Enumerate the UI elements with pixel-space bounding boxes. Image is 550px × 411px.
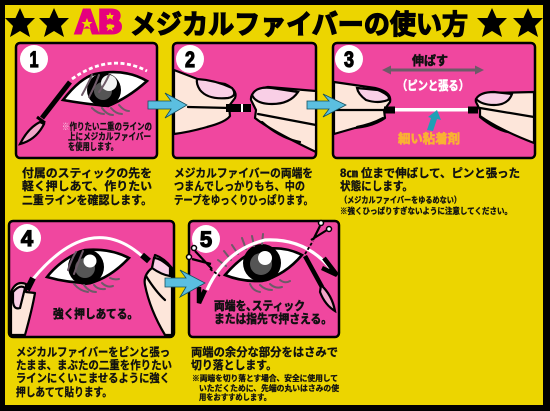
step 3 text: ※強くひっぱりすぎないように注意してください。 — [340, 206, 512, 216]
icon: right cut tape — [322, 258, 337, 275]
icon: left hand — [11, 278, 35, 335]
step number 1: 1 — [30, 47, 38, 72]
caption — [214, 298, 332, 326]
panel: step 1 — [16, 43, 157, 158]
heading text: メジカルファイバーの使い方 — [130, 10, 468, 40]
step number 3: 3 — [344, 47, 354, 72]
title — [5, 3, 543, 40]
step 4 text: ラインにくいこませるように強く — [16, 371, 170, 385]
icon: left fingers — [174, 70, 236, 134]
step number 4 — [13, 224, 41, 252]
panel: step 2 — [173, 43, 316, 158]
icon: eye — [47, 249, 129, 292]
caption: または指先で押さえる。 — [214, 311, 332, 326]
step 1 text — [22, 166, 152, 207]
icon: eye — [63, 72, 147, 115]
step 5 text: 切り落とします。 — [191, 358, 277, 372]
step 5 text: いただくために、先端の丸いはさみの使 — [199, 383, 339, 393]
panel: step 5 — [186, 220, 339, 337]
arrow: step 4 to 5 — [165, 270, 205, 297]
icon: tape — [226, 104, 251, 112]
step number 1 — [20, 45, 48, 73]
icon: scissors right — [311, 220, 332, 240]
step 5 text — [191, 345, 339, 402]
note text: ※作りたい二重のラインの — [62, 121, 152, 133]
step 2 text: テープをゆっくりひっぱります。 — [174, 194, 313, 207]
arrow: double gray — [382, 66, 484, 74]
step number 5: 5 — [200, 227, 212, 252]
arrow: teal pointer — [427, 110, 441, 131]
step 3 text: （メジカルファイバーをゆるめない） — [340, 195, 461, 205]
dotted crease line — [72, 63, 147, 79]
step 2 text — [174, 166, 313, 207]
label: thin adhesive: 細い粘着剤 — [398, 131, 460, 146]
step 4 text: たまま、まぶたの二重を作りたい — [16, 358, 172, 372]
icon: AB logo: AB — [75, 3, 122, 40]
step 4 text: 押しあてて貼ります。 — [16, 385, 112, 399]
label: stretch: 伸ばす — [412, 53, 448, 68]
adhesive line with tabs — [384, 106, 478, 114]
icon: eye — [218, 234, 302, 292]
white stretched line — [33, 238, 142, 279]
step number 2 — [176, 45, 204, 73]
caption: 強く押しあてる。 — [53, 306, 138, 321]
arrow: step 1 to 2 — [148, 93, 187, 118]
step 4 text — [16, 346, 172, 399]
step 2 text: メジカルファイバーの両端を — [174, 166, 313, 180]
step 3 text: 8㎝ 位まで伸ばして、ピンと張った — [340, 166, 520, 180]
step 2 text: つまんでしっかりもち、中の — [174, 179, 305, 193]
icon: right stars — [477, 8, 543, 37]
icon: left stars — [5, 8, 69, 37]
icon: scissors left — [186, 246, 212, 269]
note text — [62, 121, 152, 153]
arrow: step 2 to 3 — [307, 94, 346, 117]
cut lines — [210, 241, 313, 276]
icon: left fingers — [334, 82, 390, 134]
step 1 text: 付属のスティックの先を — [22, 166, 152, 180]
icon: right fingers — [251, 87, 316, 152]
step number 2: 2 — [185, 47, 195, 72]
icon: left cut tape — [199, 287, 205, 303]
panel: step 4 — [9, 221, 174, 337]
step 1 text: 軽く押しあて、作りたい — [22, 179, 152, 193]
panel: step 3 — [333, 43, 535, 158]
step number 3 — [335, 45, 363, 73]
icon: stick — [20, 82, 70, 144]
caption: 両端を､スティック — [214, 298, 305, 313]
note text: 上にメジカルファイバー — [68, 131, 151, 143]
icon: right hand — [142, 255, 172, 335]
white adhesive line — [207, 240, 330, 290]
icon: right fingers — [476, 92, 534, 143]
step 5 text: 用をおすすめします。 — [199, 393, 271, 402]
step 1 text: 二重ラインを確認します。 — [22, 193, 152, 207]
step number 5 — [192, 225, 220, 253]
note text: を使用します。 — [68, 141, 118, 153]
step 3 text — [340, 166, 520, 216]
label: pull taut: （ピンと張る） — [397, 79, 469, 93]
icon: stick — [305, 256, 335, 311]
step 5 text: 両端の余分な部分をはさみで — [191, 345, 338, 359]
step 4 text: メジカルファイバーをピンと張っ — [16, 346, 170, 359]
step number 4: 4 — [21, 226, 34, 251]
step 3 text: 状態にします。 — [340, 179, 413, 193]
step 5 text: ※両端を切り落とす場合、安全に使用して — [192, 373, 338, 383]
